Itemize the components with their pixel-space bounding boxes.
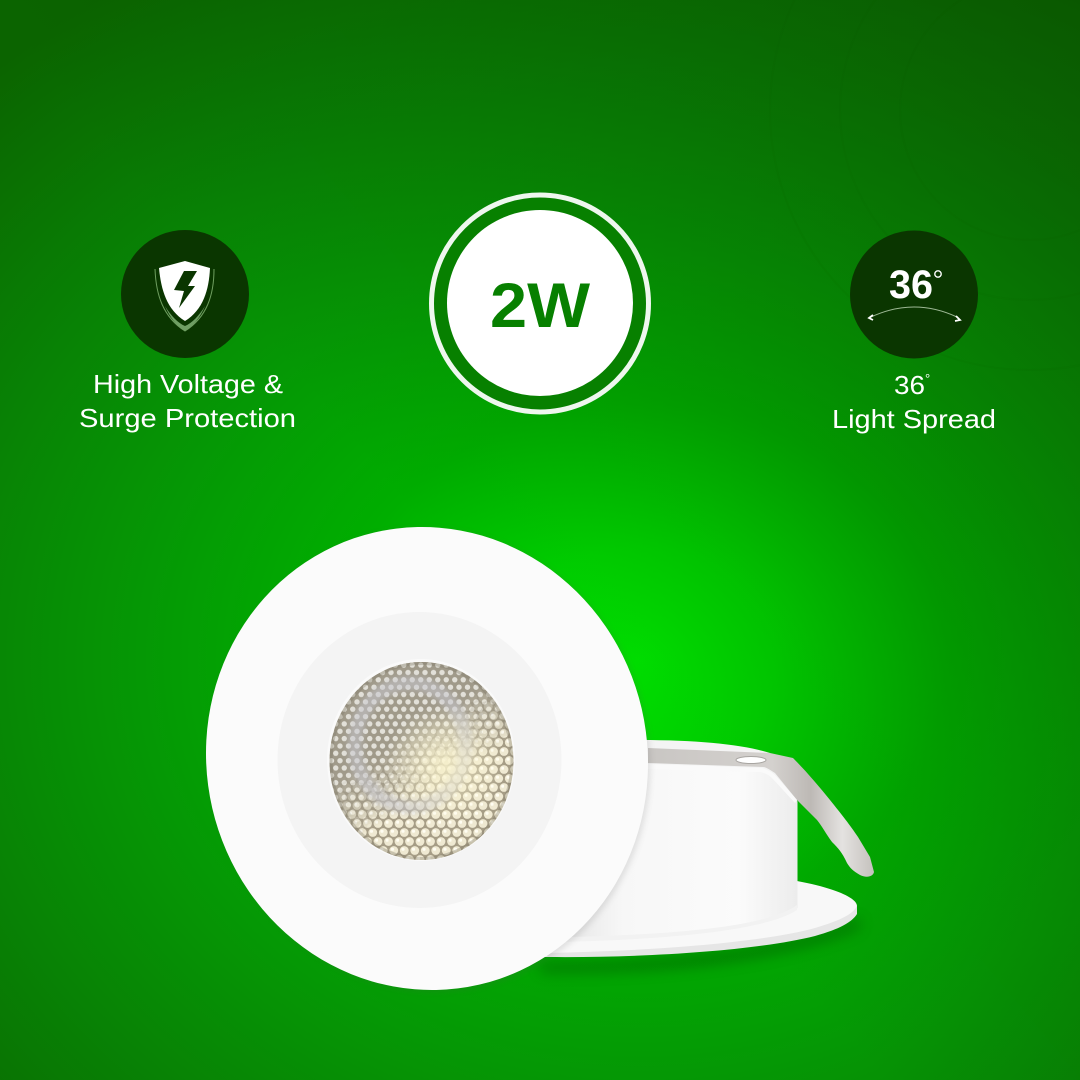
feature: surge protection — [79, 230, 296, 433]
top flange — [640, 740, 770, 772]
wattage badge — [432, 195, 648, 412]
label: 36 degree light spread: Light Spread — [832, 404, 996, 434]
icon: 36 degree angle: 36 — [889, 263, 933, 307]
clip rivet hole — [736, 756, 766, 764]
label: high voltage and surge protection: High Voltage & — [93, 369, 283, 399]
shadow on rear housing — [163, 483, 697, 1037]
icon: shield with lightning bolt — [121, 230, 249, 358]
spring clip — [648, 748, 874, 877]
product: downlight rear view — [530, 740, 874, 972]
feature: light spread — [832, 230, 996, 434]
outer trim ring — [160, 483, 694, 1034]
ground shadow — [540, 918, 860, 972]
label: high voltage and surge protection: Surge Protection — [79, 403, 296, 433]
mounting flange base — [530, 881, 857, 957]
honeycomb lens — [330, 662, 514, 860]
icon: 36 degree angle — [850, 230, 978, 358]
inner recessed ring — [278, 612, 562, 908]
housing body — [565, 758, 798, 940]
wattage value: 2W — [490, 271, 591, 341]
product: downlight front view — [206, 527, 652, 990]
label: 36 degree light spread: ° — [925, 371, 930, 386]
label: 36 degree light spread: 36 — [894, 370, 925, 400]
